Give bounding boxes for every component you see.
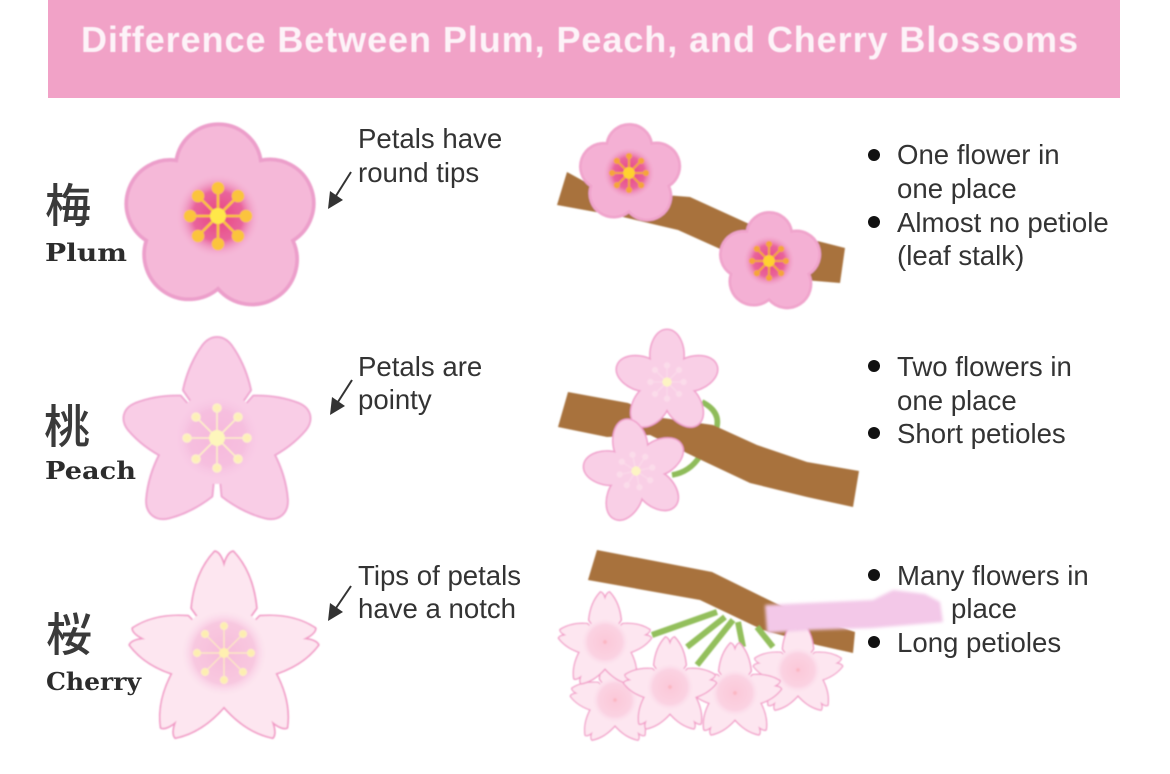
text: peach bullets bbox=[868, 351, 1072, 449]
icon: large plum blossom bbox=[126, 124, 314, 304]
illustration: plum branch bbox=[557, 124, 845, 308]
text: plum bullets: One flower in bbox=[897, 139, 1060, 170]
icon: large cherry blossom bbox=[126, 552, 322, 750]
text: plum petal note: Petals have bbox=[358, 123, 502, 154]
title banner: Difference Between Plum, Peach, and Cherry Blossoms bbox=[81, 19, 1078, 60]
text: cherry bullets bbox=[868, 560, 1089, 658]
text: plum bullets bbox=[868, 139, 1109, 271]
text: peach petal note: pointy bbox=[358, 384, 432, 415]
peach label: Peach bbox=[45, 456, 136, 485]
text: cherry bullets: Long petioles bbox=[897, 627, 1061, 658]
row: cherry bbox=[46, 550, 1089, 750]
cherry label: Cherry bbox=[46, 667, 142, 696]
smudge covering text bbox=[765, 590, 943, 633]
arrow: plum petals bbox=[328, 172, 351, 209]
illustration: peach branch bbox=[558, 330, 859, 533]
text: cherry bullets: Many flowers in bbox=[897, 560, 1089, 591]
text: cherry petal note: have a notch bbox=[358, 593, 516, 624]
title banner bbox=[48, 0, 1120, 98]
plum label: Plum bbox=[45, 238, 127, 267]
arrow: cherry petals bbox=[328, 586, 351, 621]
text: peach bullets: Two flowers in bbox=[897, 351, 1072, 382]
text: peach bullets: one place bbox=[897, 385, 1017, 416]
text: cherry bullets: place bbox=[951, 593, 1017, 624]
row: plum bbox=[45, 123, 1109, 308]
peach kanji: 桃 bbox=[44, 401, 90, 453]
text: plum bullets: one place bbox=[897, 173, 1017, 204]
icon: large peach blossom bbox=[117, 338, 317, 536]
text: peach petal note: Petals are bbox=[358, 351, 482, 382]
row: peach bbox=[44, 330, 1072, 536]
cherry kanji: 桜 bbox=[46, 609, 92, 661]
text: plum bullets: Almost no petiole bbox=[897, 207, 1109, 238]
plum kanji: 梅 bbox=[45, 180, 91, 232]
arrow: peach petals bbox=[330, 380, 352, 415]
text: peach bullets: Short petioles bbox=[897, 418, 1066, 449]
text: plum petal note: round tips bbox=[358, 157, 479, 188]
text: plum bullets: (leaf stalk) bbox=[897, 240, 1024, 271]
illustration: cherry branch bbox=[557, 550, 855, 746]
text: cherry petal note: Tips of petals bbox=[358, 560, 521, 591]
